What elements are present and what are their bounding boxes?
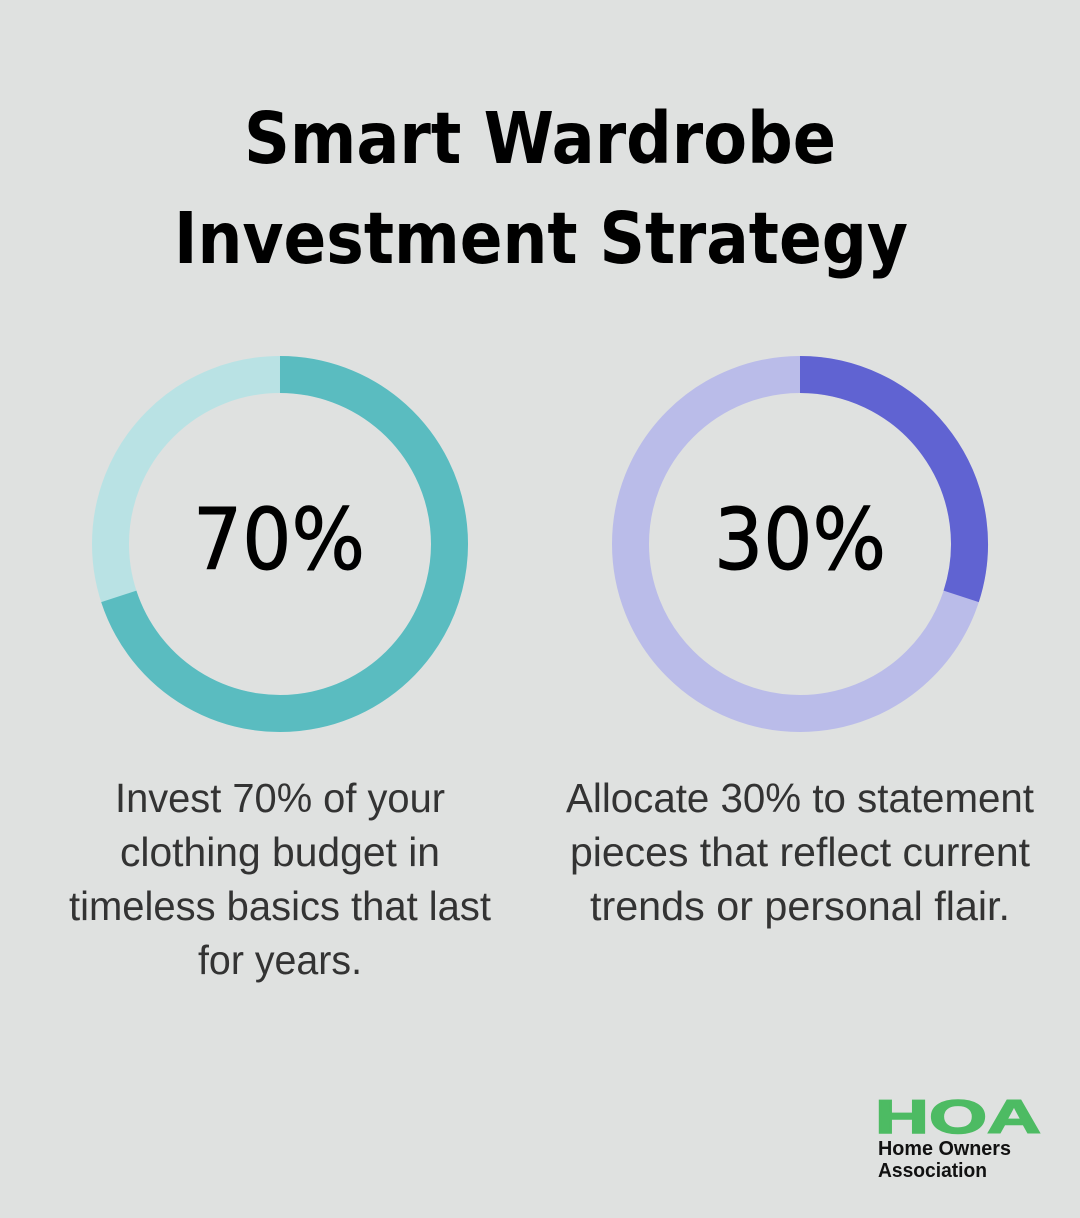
text block: basics description [69,775,492,983]
text block: statement description: Allocate 30% to statement [566,775,1035,821]
value: 30%: 30% [714,491,886,590]
logo: HOA Home Owners Association: Home Owners [878,1138,1011,1160]
text block: basics description: clothing budget in [120,829,440,875]
donut chart: 70% [110,374,450,714]
text block: basics description: Invest 70% of your [115,775,445,821]
title: Investment Strategy [174,197,908,280]
title: Smart Wardrobe [244,97,836,180]
value: 70%: 70% [193,491,365,590]
logo: HOA Home Owners Association [875,1090,1041,1182]
text block: statement description [566,775,1035,929]
logo: HOA Home Owners Association: HOA [875,1090,1041,1143]
panel: 30% statement pieces [566,374,1035,929]
logo: HOA Home Owners Association: Association [878,1160,987,1182]
text block: basics description: timeless basics that last [69,883,492,929]
text block: basics description: for years. [198,937,362,983]
text block: statement description: pieces that reflect current [570,829,1031,875]
title [174,97,908,280]
donut chart: 30% [630,374,970,714]
panel: 70% basics [69,374,492,983]
text block: statement description: trends or personal flair. [590,883,1010,929]
